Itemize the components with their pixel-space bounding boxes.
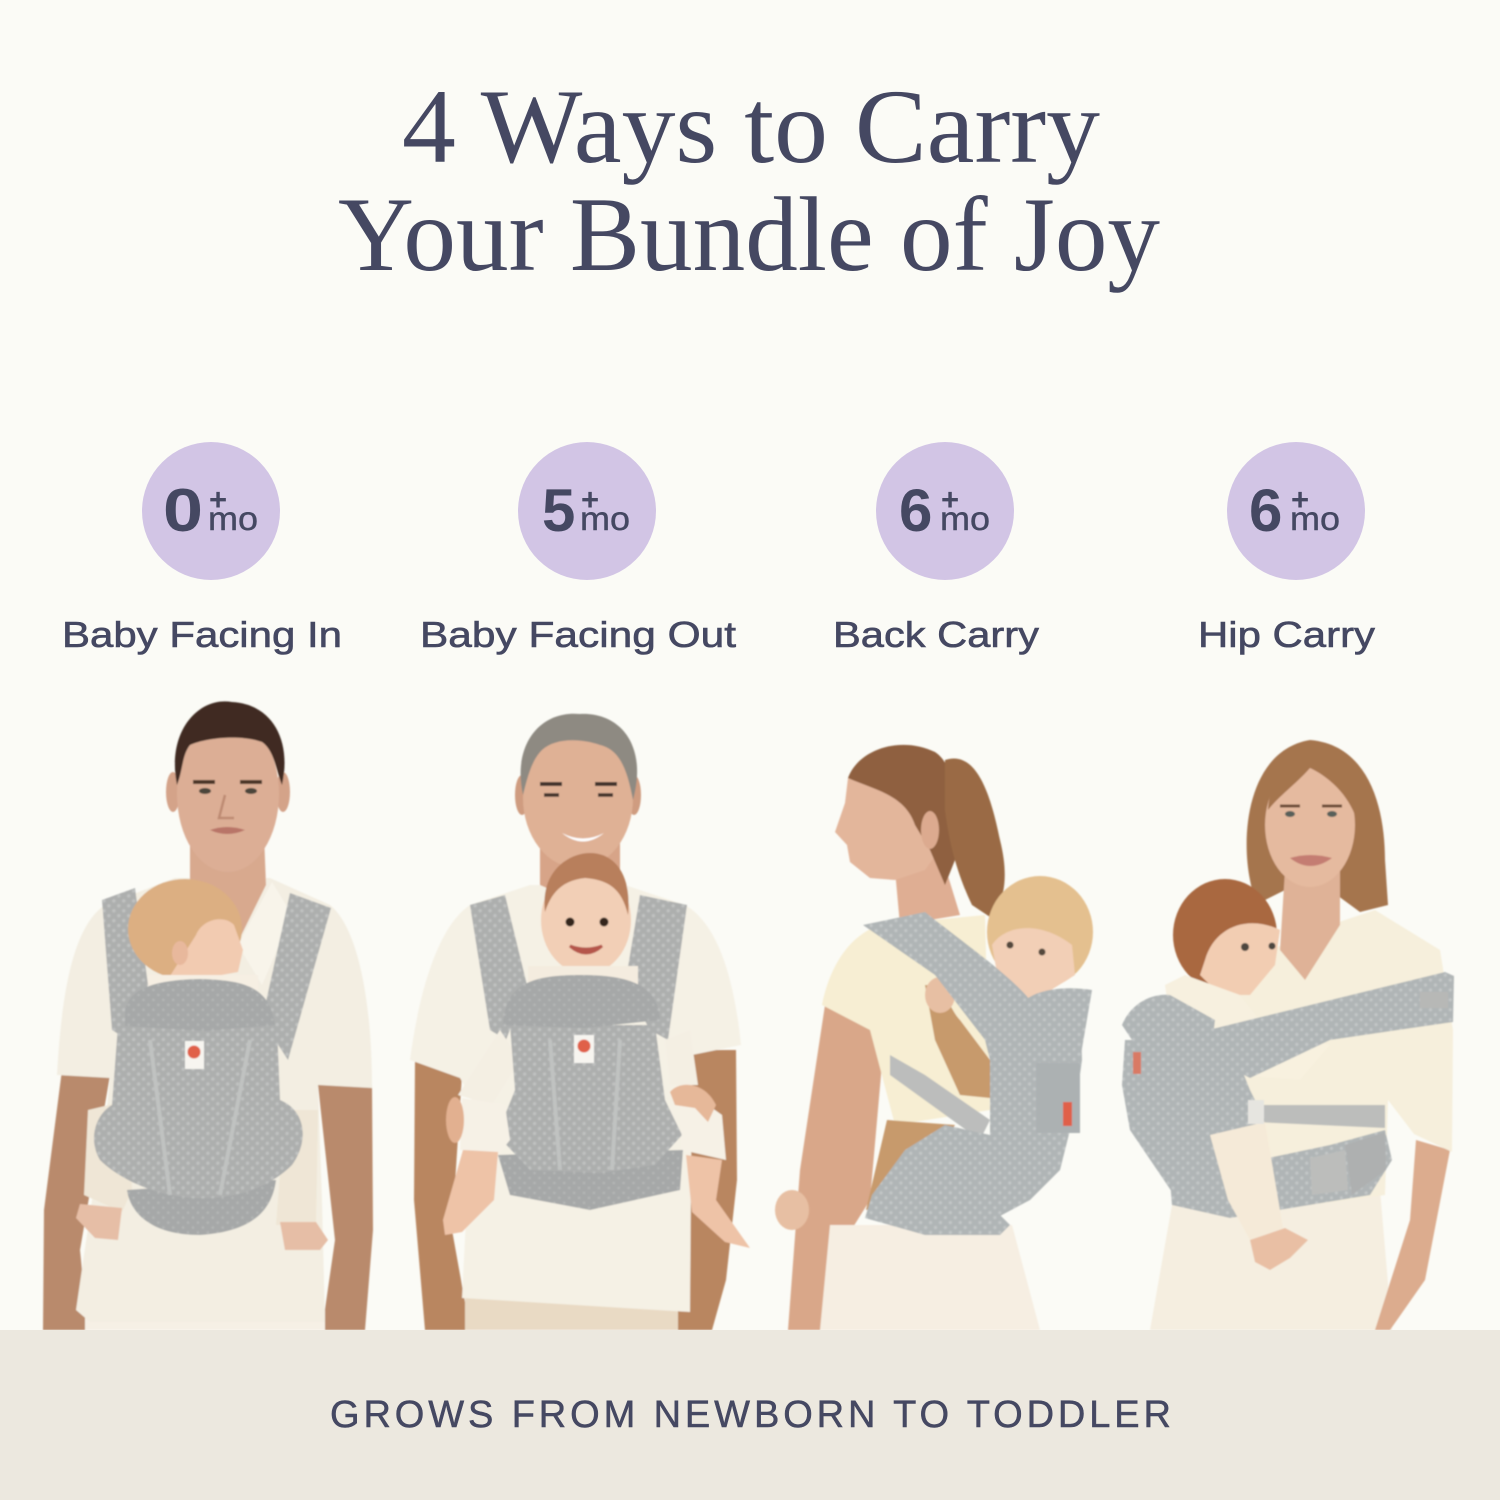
label: baby facing out: Baby Facing Out <box>420 614 736 655</box>
badge: 5+ months: mo <box>580 500 630 537</box>
badge: 6+ months back: 6 <box>899 477 932 544</box>
badge: 5+ months: 5 <box>542 477 575 544</box>
badge: 0+ months: + <box>209 482 227 517</box>
badge: 5+ months <box>518 442 656 580</box>
title: 4 Ways to Carry <box>402 68 1100 185</box>
badge: 6+ months back <box>876 442 1014 580</box>
footer caption: GROWS FROM NEWBORN TO TODDLER <box>330 1394 1171 1436</box>
badge: 6+ months back: mo <box>940 500 990 537</box>
title <box>338 68 1160 293</box>
badge: 0+ months: 0 <box>163 477 203 544</box>
badge: 6+ months hip: mo <box>1290 500 1340 537</box>
badge: 6+ months hip: + <box>1291 482 1309 517</box>
label: hip carry: Hip Carry <box>1198 614 1375 655</box>
badge: 6+ months hip: 6 <box>1249 477 1282 544</box>
title: Your Bundle of Joy <box>338 176 1160 293</box>
label: baby facing in: Baby Facing In <box>62 614 342 655</box>
badge: 6+ months back: + <box>941 482 959 517</box>
badge: 0+ months: mo <box>208 500 258 537</box>
footer band <box>0 1330 1500 1500</box>
label: back carry: Back Carry <box>833 614 1039 655</box>
photo: father with baby facing in <box>43 701 373 1330</box>
badge: 6+ months hip <box>1227 442 1365 580</box>
photo: woman with baby in hip carry <box>1122 740 1454 1330</box>
photo: father with baby facing out <box>410 714 750 1330</box>
badge: 5+ months: + <box>581 482 599 517</box>
badge: 0+ months <box>142 442 280 580</box>
photo: woman with baby in back carry <box>775 745 1093 1330</box>
